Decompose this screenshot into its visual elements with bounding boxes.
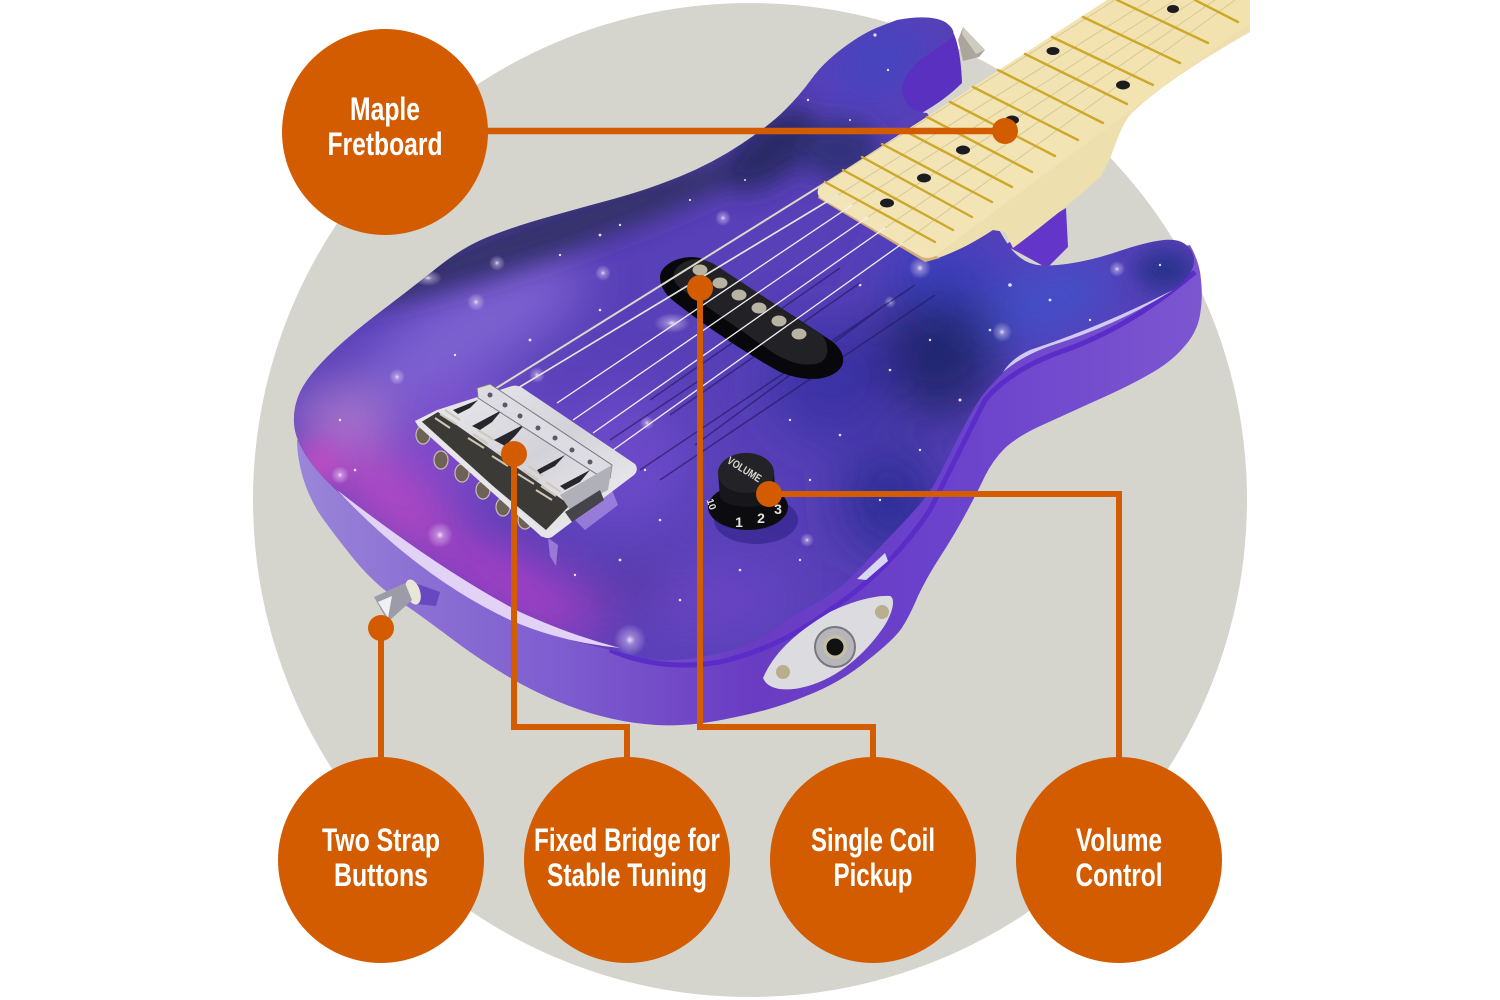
connector: maple fretboard: [480, 118, 1018, 144]
output jack plate: [763, 596, 893, 689]
callout: maple fretboard: Fretboard: [328, 126, 442, 162]
knob numbers: 2: [757, 510, 765, 526]
knob text: VOLUME: [725, 455, 763, 485]
upper horn side: [895, 22, 962, 114]
bridge front rail: [415, 420, 546, 537]
strings over fretboard: [825, 0, 1235, 243]
lower strap button: [374, 577, 440, 622]
fretboard surface: [818, 0, 1250, 258]
fret markers: [880, 5, 1179, 208]
callout: volume control: Control: [1076, 857, 1162, 893]
top strap button: [958, 27, 985, 61]
frets: [825, 0, 1238, 242]
connector: single coil pickup: [687, 275, 873, 765]
knob numbers: [704, 497, 782, 530]
callout: volume control: Volume: [1076, 822, 1162, 858]
pickup cavity: [660, 257, 843, 379]
jack plate screws: [776, 665, 790, 679]
connector: fixed bridge: [501, 441, 627, 765]
connector: volume control: [756, 481, 1119, 765]
bridge reflection: [548, 490, 618, 566]
bridge spring row: [418, 412, 570, 530]
body edge purple line: [610, 272, 1195, 665]
callout: single coil pickup: Single Coil: [811, 822, 935, 858]
callout: fixed bridge: Fixed Bridge for: [534, 822, 720, 858]
right edge highlight: [1003, 290, 1173, 372]
bridge: [415, 384, 637, 566]
knob skirt: [708, 484, 788, 530]
knob body: [718, 453, 776, 507]
pickup cover: [673, 259, 827, 365]
end block: [560, 465, 612, 510]
knob cap: [718, 453, 774, 493]
neck side and heel: [925, 22, 1250, 262]
jack-side highlight: [857, 553, 888, 580]
callout: single coil pickup: [770, 757, 976, 963]
callout: volume control: [1016, 757, 1222, 963]
callout: single coil pickup: Pickup: [834, 857, 912, 893]
background circle: [253, 3, 1247, 997]
heel block: [1005, 208, 1068, 268]
saddle row: [477, 384, 612, 478]
jack: [815, 627, 855, 667]
callout: two strap buttons: [278, 757, 484, 963]
glow stars: [331, 210, 1125, 656]
knob numbers: 3: [774, 501, 782, 517]
knob shadow: [714, 496, 798, 544]
callout: maple fretboard: [282, 29, 488, 235]
bridge screws: [416, 426, 532, 529]
callout: fixed bridge: [524, 757, 730, 963]
guitar illustration: [280, 0, 1250, 725]
saddle slots: [453, 400, 590, 490]
knob numbers: 10: [704, 497, 718, 512]
bridge plate: [415, 386, 637, 538]
string shadows: [610, 268, 935, 480]
knob numbers: 1: [735, 514, 743, 530]
callout: two strap buttons: Buttons: [334, 857, 428, 893]
galaxy top surface: [280, 0, 1220, 680]
neck: [818, 0, 1250, 262]
connector: strap buttons: [368, 615, 394, 765]
stars: [339, 33, 1161, 601]
strings: [490, 183, 903, 450]
fretboard end grain: [818, 190, 940, 262]
volume knob: [704, 453, 798, 544]
lower body edge highlight: [337, 490, 620, 648]
callout: fixed bridge: Stable Tuning: [547, 857, 707, 893]
pole pieces: [692, 264, 806, 340]
guitar body side: [297, 245, 1202, 725]
callout: two strap buttons: Two Strap: [322, 822, 440, 858]
callout: maple fretboard: Maple: [350, 91, 420, 127]
pickup: [660, 257, 843, 379]
